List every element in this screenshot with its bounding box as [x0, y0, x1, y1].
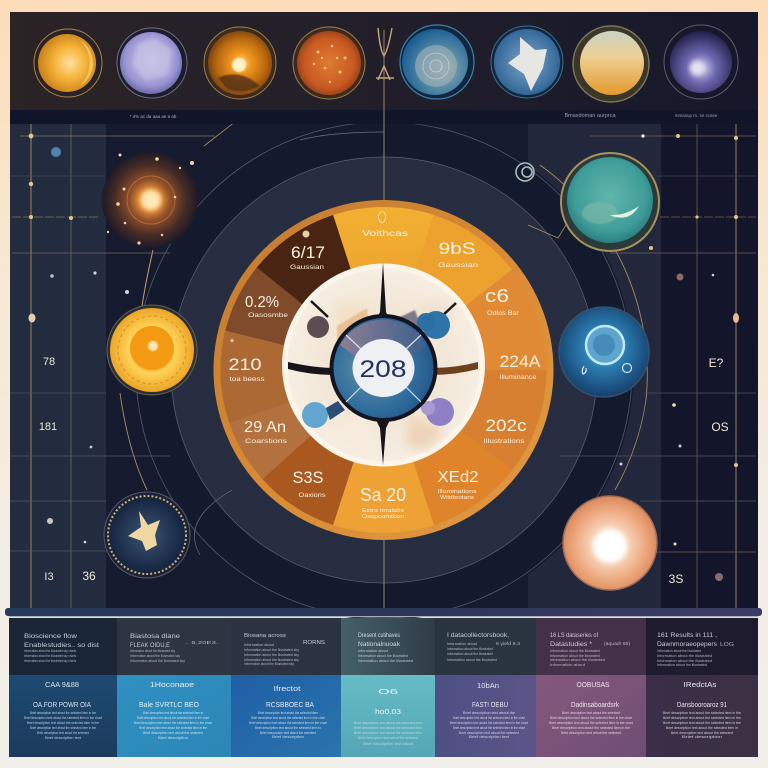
column 6: Dadinsaboardsrk [571, 702, 619, 709]
column 6: Information about [550, 663, 586, 667]
column 6: Information about the illustrated [550, 649, 600, 653]
column 4: Brief description text about the selected item [354, 721, 422, 725]
column 3: Information about the illustrated sky [244, 653, 299, 657]
wheel labels: Gaussian [290, 265, 324, 271]
wheel labels: Odlos Bar [487, 311, 519, 317]
column 6: Information about the illustrated [550, 658, 605, 662]
column 4: O6 [378, 689, 398, 696]
column 3: Brief description text about the selected item in the chart [249, 721, 328, 725]
column 6: 16 LS dataseries of [550, 633, 598, 639]
hub year: 208 [360, 356, 406, 383]
column 2: Bale SVRTLC BEO [139, 702, 200, 709]
orbit rings around wheel [120, 118, 647, 620]
column 7: Brief description text about the selected item in the [663, 716, 741, 720]
column 1: Information about the illustrated sky charts [24, 649, 76, 653]
wheel labels: Oaxions [298, 493, 326, 499]
column 3: Brief description text about the selected item in [255, 726, 321, 730]
side numbers: 36 [82, 569, 96, 583]
wheel inner disc [282, 264, 485, 466]
wheel labels: * [230, 337, 235, 349]
column 3: Brief description text about the selected item in the chart [251, 716, 326, 720]
teal planet [561, 153, 659, 251]
column 7: Brief description text about the selected item in [666, 726, 738, 730]
column 5: FAST! OEBU [472, 702, 508, 709]
column 5: Brief description text about the selected item in the chart [453, 716, 526, 720]
column 7: Information about the illustrated [657, 663, 707, 667]
column 1: Brief description text about the selected item in the [30, 726, 96, 730]
wheel labels: 6/17 [291, 243, 325, 262]
column 4: ho0.03 [375, 709, 401, 716]
column 1: Brief description text about the selected item in the chart [24, 716, 103, 720]
column 2: Brief description text about the selected item in the chart [134, 721, 213, 725]
column 2: Brief description [158, 736, 188, 740]
column 4: Nationalnuoak [358, 642, 401, 648]
column 1: Brief description text about the selected [37, 731, 89, 735]
side numbers: 78 [43, 356, 55, 368]
column 3: Ifrectot [274, 686, 301, 693]
side numbers: 181 [39, 421, 57, 433]
wheel labels [228, 212, 541, 520]
central vertical axis [383, 30, 385, 610]
column 5: Brief description text about the [463, 711, 515, 715]
wheel labels: 29 An [244, 419, 286, 436]
planet 1 amber [34, 29, 102, 97]
column 1: Bioscience flow [24, 633, 77, 640]
wheel labels: 210 [228, 355, 262, 374]
column 2: Information about the illustrated sky [130, 659, 185, 663]
sub band with small captions: Bmaxdoman aurprca [564, 113, 616, 119]
column 1: Brief description text about the selected item in the [30, 711, 96, 715]
column 4: Information about the illustrated [358, 654, 408, 658]
column 5: Information about the illustrated [447, 647, 493, 651]
column 2: Brief description text about the selected item in the chart [137, 716, 210, 720]
column 4: Brief description text about the selected item [354, 726, 422, 730]
column 6: Brief description text about the selected item in the [552, 726, 630, 730]
side numbers: E? [709, 356, 724, 370]
column 3: Information about [244, 643, 275, 647]
column 4: Information about [358, 649, 389, 653]
column 2: .. 6,20E3. [185, 640, 218, 645]
column 4: Brief description text about [363, 742, 414, 746]
column 7: Information about the illustrated [657, 649, 701, 653]
divider bar [5, 608, 762, 617]
column 2: Information about the illustrated sky [130, 654, 180, 658]
column 7: Dansbooroaroz 91 [677, 702, 727, 709]
wheel labels: Illuminations [438, 489, 477, 495]
column 1: Brief description text about the selected item in the [27, 721, 99, 725]
column 7: 161 Results in 111 , [657, 632, 717, 639]
column 3: RCSBBOEC BA [266, 702, 314, 709]
column 1: Information about the illustrated sky charts [24, 654, 76, 658]
column 3 [231, 618, 341, 757]
column 6: Datastudies * [550, 642, 593, 648]
column 7: Information about the illustrated [657, 654, 712, 658]
central hub [330, 314, 438, 422]
column 4: Information about the illustrated [358, 659, 413, 663]
column 2: Biastosa dlane [130, 633, 180, 640]
wheel labels: toa beess [230, 377, 264, 383]
column 6: Brief description text about the selected [562, 711, 620, 715]
column 7: LOG [720, 642, 734, 648]
column 3: RORNS [303, 640, 326, 646]
planet 7 golden [573, 26, 649, 102]
wheel labels: 224A [500, 352, 541, 371]
column 7: Information about the illustrated [657, 659, 712, 663]
wheel labels: S3S [292, 468, 324, 487]
planet 4 copper [293, 27, 365, 99]
column 2: Brief description text about the selected item in the [139, 726, 207, 730]
chart grid nodes and stars [28, 134, 739, 581]
wheel labels: Coarstions [245, 439, 287, 445]
column 1 [9, 618, 117, 757]
column 4: Brief description text about the selected [358, 736, 418, 740]
wheel labels: Oaspoamtbon [362, 514, 404, 520]
column 2: Information about the illustrated sky [130, 649, 175, 653]
column 5 [435, 618, 536, 757]
planet 2 violet [117, 28, 187, 98]
column 6: Information about the illustrated [550, 654, 600, 658]
icon: glass ring [516, 163, 534, 181]
column 1: Information about the illustrated sky charts [24, 659, 76, 663]
column 4: Brief description text about the selected item [354, 731, 422, 735]
column 5: I datacollectorsbook, [447, 633, 509, 639]
column 5: Brief description text [469, 735, 510, 739]
sub band with small captions: mmaxup m. se scase [675, 113, 718, 118]
column 4: Dresent cutihaves [358, 633, 400, 639]
icon: top instrument [376, 28, 394, 80]
column 2: FLEAK OIDU,E [130, 642, 171, 649]
column 3: Information about the illustrated sky [244, 662, 294, 666]
column 7 [646, 618, 758, 757]
planet 8 purple [664, 25, 738, 99]
column 6: (aquadr 65) [604, 641, 631, 646]
sub band with small captions [10, 110, 758, 124]
column 1: Brief description text [45, 736, 82, 740]
panel: dark star chart [10, 12, 758, 609]
column 3: Information about the illustrated sky [244, 648, 299, 652]
column 2: Brief description text about the selected item in [143, 711, 203, 715]
planet 6 blue star [491, 26, 563, 98]
column 7: Brief description [682, 735, 722, 739]
column 3: Biosana across [244, 633, 286, 639]
wheel labels: Voithcas [362, 229, 408, 238]
inner orbs [302, 311, 454, 428]
column 2: Brief description text about the selected [143, 731, 203, 735]
side numbers: I3 [44, 571, 54, 583]
peach sun [563, 496, 657, 590]
column 3: Brief description [272, 735, 304, 739]
column 4 [341, 618, 435, 757]
star medallion [104, 492, 190, 578]
column 3: Brief description text about the selected [260, 731, 316, 735]
chart grid lines [10, 124, 756, 608]
top band [10, 12, 758, 110]
column 2 [117, 618, 231, 757]
column 5: Brief description text about the selected item in the chart [453, 726, 526, 730]
column 7: Brief description text about the selected item in the [663, 721, 741, 725]
wheel labels: Illustrations [484, 439, 524, 445]
planet 5 blue [400, 25, 474, 99]
wheel chart [214, 200, 554, 540]
wheel outer ring [214, 200, 554, 540]
column 5: Information about the illustrated [447, 652, 493, 656]
column 6: Brief description text about the selected [561, 731, 621, 735]
column 5: 6 yield 8.3 [496, 641, 521, 646]
wheel segments [220, 207, 547, 533]
wheel labels: Illuminance [500, 375, 537, 381]
wheel labels: Gaussian [438, 263, 478, 269]
column 7: IRedctAs [684, 682, 717, 689]
column 1: Enablestudies.. so dist [24, 642, 99, 649]
side numbers: 3S [669, 572, 683, 586]
column 6 [536, 618, 646, 757]
wheel labels: XEd2 [438, 469, 479, 486]
wheel labels: 202c [486, 416, 527, 435]
column 6: Brief description text about the selected item in the chart [550, 716, 633, 720]
sub band with small captions: * 4% ac da aaa ae a ab [130, 114, 177, 119]
wheel labels: Sa 20 [360, 485, 406, 505]
galaxy [102, 152, 198, 248]
column 6: Brief description text about the selected item in the chart [549, 721, 634, 725]
wheel labels: Wildbrotans [440, 495, 474, 501]
planet row [34, 25, 738, 102]
column 5: Brief description text about the selected item in the chart [450, 721, 529, 725]
column 1: CAA 9&88 [45, 682, 79, 689]
blue glowing planet [559, 307, 649, 397]
column 5: Information about [447, 642, 478, 646]
wheel labels: Oasosmbe [248, 313, 289, 319]
wheel labels: Extra toralabs [362, 508, 405, 514]
column 5: Brief description text about the selected [459, 731, 519, 735]
column 7: Brief description text about the selected item in the [663, 711, 741, 715]
sun coin [107, 305, 197, 395]
column 3: Information about the illustrated sky [244, 658, 299, 662]
column 3: Brief description text about the selected item [258, 711, 318, 715]
wheel labels: 0.2% [245, 294, 279, 311]
column 1: OA.FOR POWR OIA [33, 702, 91, 709]
side numbers: OS [711, 420, 729, 434]
column 5: 10bAn [477, 683, 499, 690]
column 6: OOBUSAS [576, 682, 610, 689]
column 5: Information about the illustrated [447, 658, 497, 662]
wheel labels: 9bS [438, 239, 476, 258]
column 2: 1Hoconaoe [150, 682, 194, 689]
column 7: Dawnmoraeopepers [657, 641, 718, 648]
compass spikes [288, 262, 478, 465]
bottom info columns [9, 618, 758, 757]
side numbers [39, 356, 729, 586]
planet 3 orange [204, 27, 276, 99]
wheel labels: c6 [485, 286, 509, 306]
column 7: Brief description text about the selected [671, 731, 733, 735]
